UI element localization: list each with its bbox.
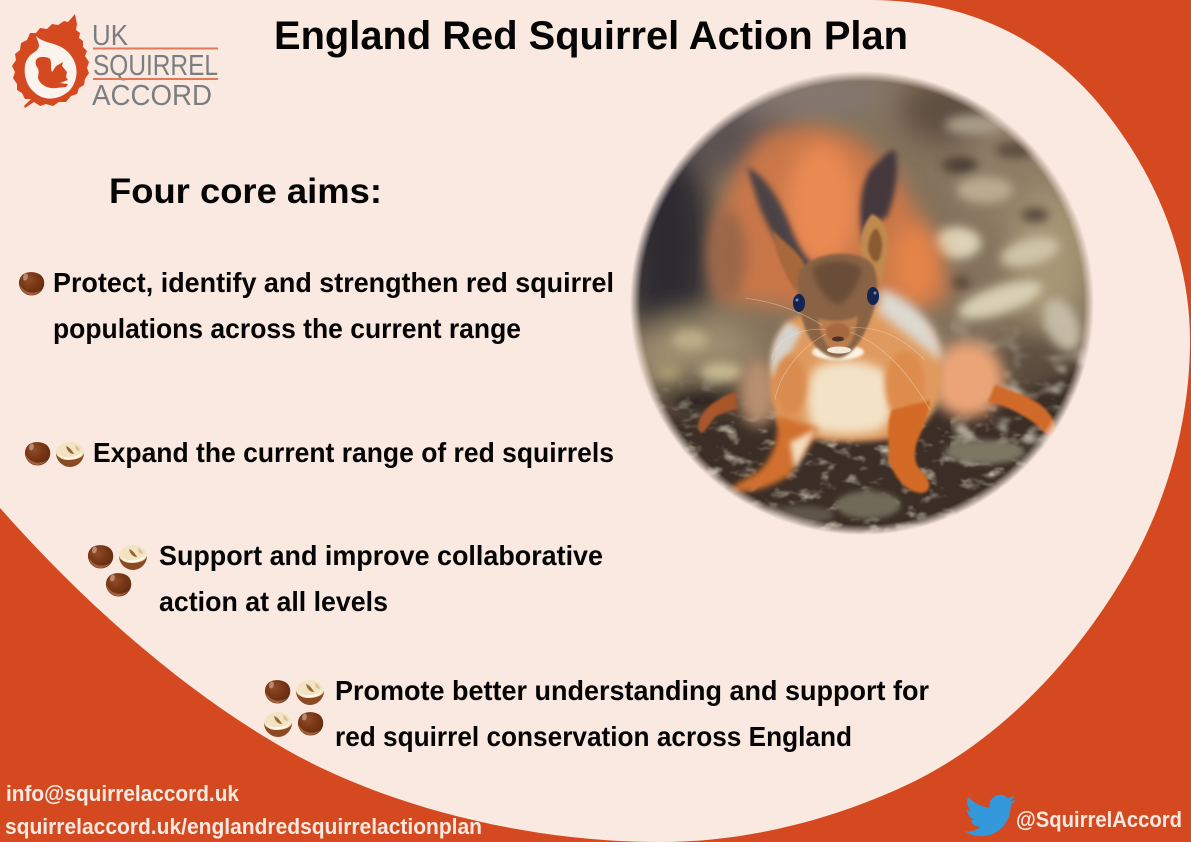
aim 1 <box>19 267 614 344</box>
squirrel hind legs <box>698 342 1056 436</box>
icon: four hazelnuts <box>264 680 324 737</box>
aim 1 text: Protect, identify and strengthen red squirrel <box>53 267 614 298</box>
squirrel body <box>770 288 942 442</box>
ground: bark <box>656 320 1086 534</box>
icon: two hazelnuts <box>25 442 84 467</box>
aim 2 text: Expand the current range of red squirrels <box>93 437 614 468</box>
aim 3 text: action at all levels <box>159 586 388 617</box>
icon: twitter bird <box>965 795 1016 836</box>
aim 1 text <box>53 267 614 344</box>
squirrel ears <box>747 150 897 292</box>
aim 1 text: populations across the current range <box>53 313 521 344</box>
squirrel front legs <box>730 400 930 493</box>
aim 3 text <box>159 540 603 617</box>
twitter handle: @SquirrelAccord <box>1016 807 1182 832</box>
contact details: squirrelaccord.uk/englandredsquirrelactionplan <box>5 814 482 839</box>
wordmark: UK <box>92 20 129 52</box>
icon: leaf with squirrel <box>12 14 89 108</box>
heading: Four core aims: Four core aims: <box>109 172 382 211</box>
wordmark <box>92 20 218 112</box>
aim 3 text: Support and improve collaborative <box>159 540 603 571</box>
contact details: info@squirrelaccord.uk <box>6 781 240 806</box>
squirrel tail <box>710 127 950 309</box>
aim 4 <box>264 675 929 752</box>
aim 3 <box>88 540 603 617</box>
icon: three hazelnuts <box>88 545 147 596</box>
aim 2 <box>25 437 614 468</box>
aim 4 text: Promote better understanding and support for <box>335 675 929 706</box>
wordmark: SQUIRREL <box>93 50 218 82</box>
aim 4 text: red squirrel conservation across England <box>335 721 852 752</box>
title: England Red Squirrel Action Plan <box>274 14 908 58</box>
logo: UK Squirrel Accord <box>12 14 218 112</box>
icon: one hazelnut <box>19 272 44 295</box>
contact details <box>5 781 482 839</box>
aim 4 text <box>335 675 929 752</box>
squirrel whiskers <box>745 298 930 410</box>
squirrel head <box>793 254 879 358</box>
photo: red squirrel in a soft circle <box>630 72 1094 534</box>
wordmark: ACCORD <box>92 80 212 112</box>
